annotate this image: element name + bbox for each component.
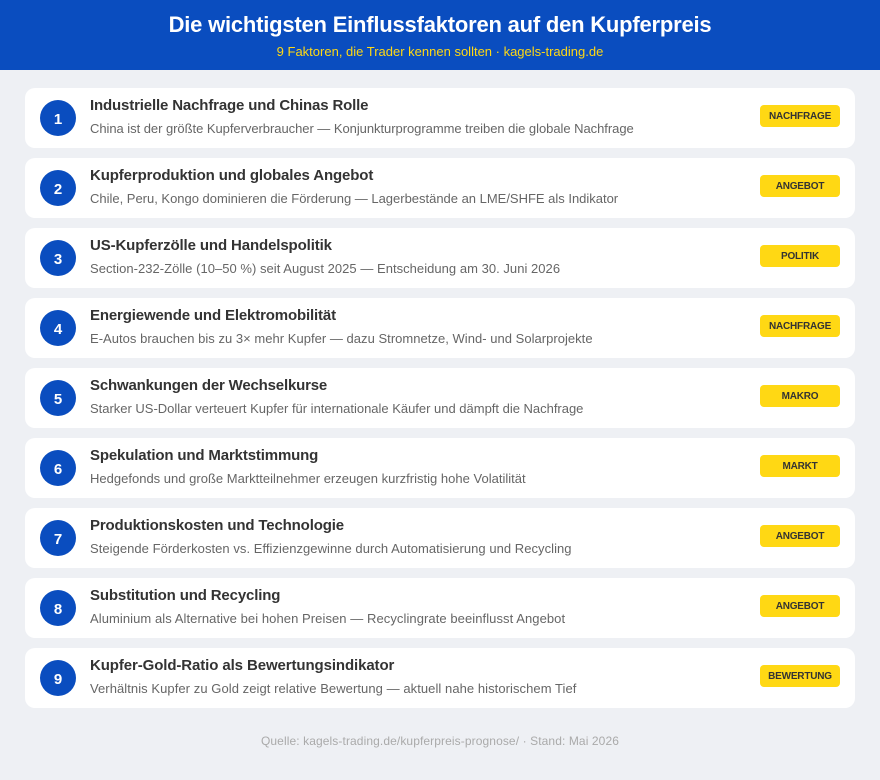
panel: factor 1	[25, 88, 855, 148]
number badge 1	[40, 100, 76, 136]
factor 5 heading: Schwankungen der Wechselkurse	[90, 377, 327, 394]
category tag: Nachfrage	[760, 105, 840, 127]
subtitle: 9 Faktoren, die Trader kennen sollten · kagels-trading.de	[277, 44, 603, 59]
category tag: Politik: POLITIK	[781, 251, 819, 262]
number badge 2: 2	[54, 181, 62, 198]
title: Die wichtigsten Einflussfaktoren auf den Kupferpreis	[169, 12, 711, 37]
factor 1 description: China ist der größte Kupferverbraucher — Konjunkturprogramme treiben die globale Nachfrage	[90, 121, 634, 136]
panel: factor 3	[25, 228, 855, 288]
category tag: Bewertung	[760, 665, 840, 687]
factor 8 description: Aluminium als Alternative bei hohen Preisen — Recyclingrate beeinflusst Angebot	[90, 611, 565, 626]
panel: factor 8	[25, 578, 855, 638]
number badge 5: 5	[54, 391, 62, 408]
number badge 7	[40, 520, 76, 556]
number badge 4: 4	[54, 321, 62, 338]
number badge 5	[40, 380, 76, 416]
factor 7 heading: Produktionskosten und Technologie	[90, 517, 344, 534]
factor 9 heading: Kupfer-Gold-Ratio als Bewertungsindikator	[90, 657, 394, 674]
number badge 3: 3	[54, 251, 62, 268]
factor 3 description: Section-232-Zölle (10–50 %) seit August 2025 — Entscheidung am 30. Juni 2026	[90, 261, 560, 276]
header banner	[0, 0, 880, 70]
panel: factor 6	[25, 438, 855, 498]
category tag: Nachfrage	[760, 315, 840, 337]
factor 2 description: Chile, Peru, Kongo dominieren die Förderung — Lagerbestände an LME/SHFE als Indikator	[90, 191, 618, 206]
number badge 2	[40, 170, 76, 206]
category tag: Politik	[760, 245, 840, 267]
category tag: Nachfrage: NACHFRAGE	[769, 321, 831, 332]
number badge 9: 9	[54, 671, 62, 688]
factor 2 heading: Kupferproduktion und globales Angebot	[90, 167, 373, 184]
factor 7 description: Steigende Förderkosten vs. Effizienzgewinne durch Automatisierung und Recycling	[90, 541, 572, 556]
category tag: Makro	[760, 385, 840, 407]
panel: factor 9	[25, 648, 855, 708]
factor 9 description: Verhältnis Kupfer zu Gold zeigt relative Bewertung — aktuell nahe historischem Tief	[90, 681, 576, 696]
category tag: Markt	[760, 455, 840, 477]
number badge 6: 6	[54, 461, 62, 478]
number badge 9	[40, 660, 76, 696]
footer source line: Quelle: kagels-trading.de/kupferpreis-prognose/ · Stand: Mai 2026	[261, 734, 619, 748]
factor 8 heading: Substitution und Recycling	[90, 587, 280, 604]
category tag: Angebot: ANGEBOT	[776, 601, 824, 612]
factor 3 heading: US-Kupferzölle und Handelspolitik	[90, 237, 332, 254]
factor 6 heading: Spekulation und Marktstimmung	[90, 447, 318, 464]
panel: factor 5	[25, 368, 855, 428]
factor 5 description: Starker US-Dollar verteuert Kupfer für internationale Käufer und dämpft die Nachfrage	[90, 401, 583, 416]
factor 4 description: E-Autos brauchen bis zu 3× mehr Kupfer — dazu Stromnetze, Wind- und Solarprojekte	[90, 331, 593, 346]
category tag: Nachfrage: NACHFRAGE	[769, 111, 831, 122]
category tag: Markt: MARKT	[782, 461, 818, 472]
category tag: Angebot	[760, 175, 840, 197]
category tag: Makro: MAKRO	[782, 391, 818, 402]
panel: factor 7	[25, 508, 855, 568]
number badge 4	[40, 310, 76, 346]
factor 6 description: Hedgefonds und große Marktteilnehmer erzeugen kurzfristig hohe Volatilität	[90, 471, 526, 486]
number badge 7: 7	[54, 531, 62, 548]
panel: factor 2	[25, 158, 855, 218]
number badge 1: 1	[54, 111, 62, 128]
category tag: Angebot: ANGEBOT	[776, 181, 824, 192]
number badge 6	[40, 450, 76, 486]
number badge 3	[40, 240, 76, 276]
category tag: Bewertung: BEWERTUNG	[768, 671, 832, 682]
category tag: Angebot	[760, 525, 840, 547]
category tag: Angebot	[760, 595, 840, 617]
panel: factor 4	[25, 298, 855, 358]
number badge 8: 8	[54, 601, 62, 618]
category tag: Angebot: ANGEBOT	[776, 531, 824, 542]
factor 4 heading: Energiewende und Elektromobilität	[90, 307, 336, 324]
factor 1 heading: Industrielle Nachfrage und Chinas Rolle	[90, 97, 368, 114]
number badge 8	[40, 590, 76, 626]
